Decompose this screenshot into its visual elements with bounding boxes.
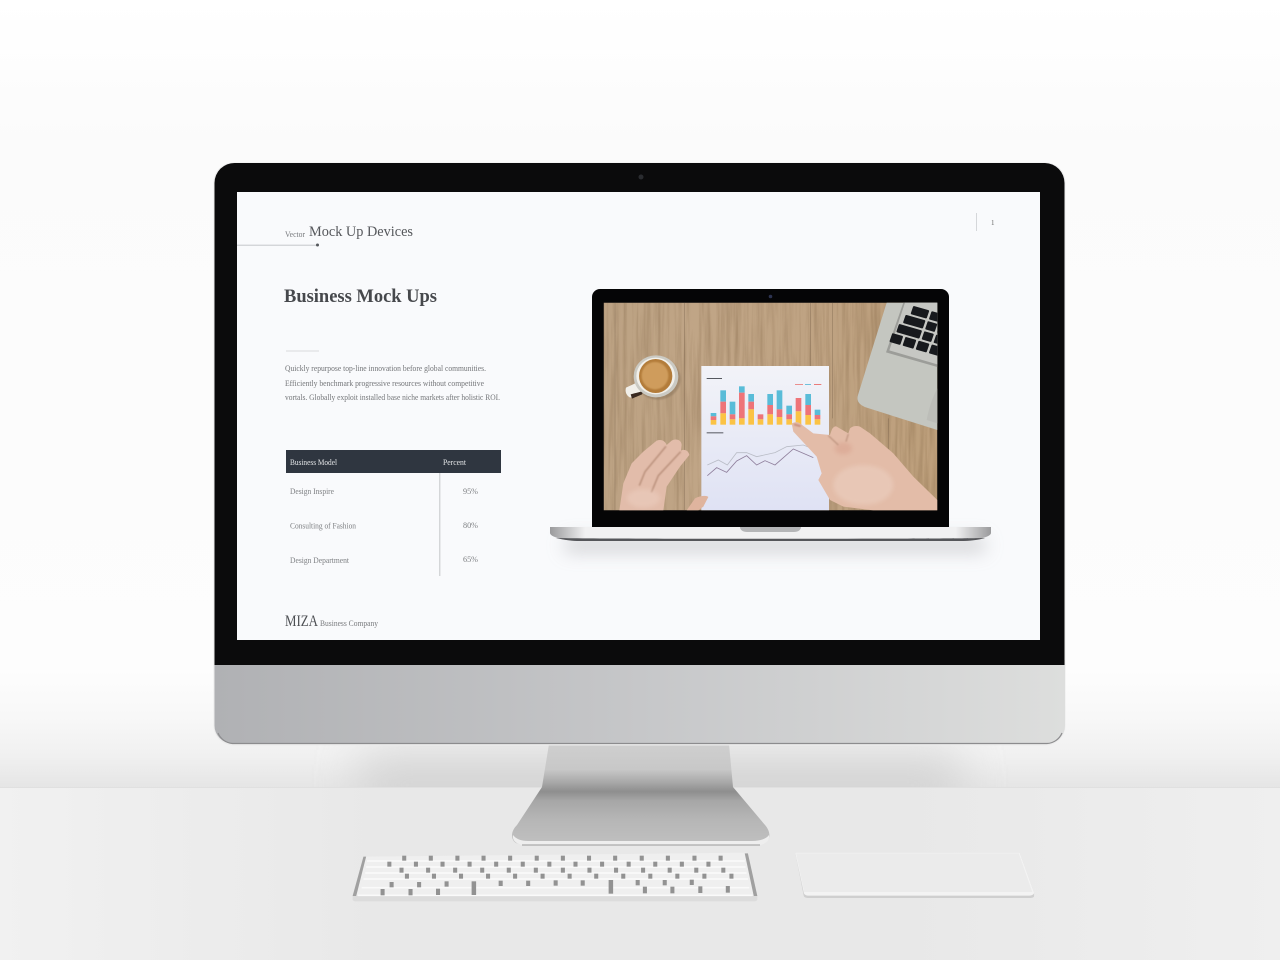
body text: vortals. Globally exploit installed base niche markets after holistic ROI. [285,393,500,402]
table rows: 65% [463,555,478,564]
stacked bar chart [711,386,820,425]
laptop screen photo [604,303,965,510]
key gaps [381,856,733,895]
left hand [619,440,708,510]
wood table [604,303,937,510]
laptop shadow [565,538,985,552]
background: wall and desk [0,723,1280,960]
keyboard [353,853,757,901]
table header: Percent [443,458,467,467]
page number [976,213,995,231]
webcam [638,174,644,180]
monitor chin [214,660,1065,744]
legend [795,384,822,385]
table rows [290,487,478,565]
laptop base [550,527,991,541]
monitor [214,162,1066,746]
heading: Business Mock Ups [284,287,437,307]
printed report [701,366,829,510]
monitor bezel [214,163,1064,665]
slide header [237,224,413,246]
body text [285,350,500,402]
table header [286,450,501,473]
table rows: Design Department [290,556,350,565]
page number: 1 [991,219,995,227]
slide header: Mock Up Devices [309,224,413,240]
table rows: Consulting of Fashion [290,522,356,530]
monitor body rim [214,162,1066,746]
line chart [707,445,820,476]
body text: Efficiently benchmark progressive resources without competitive [285,379,484,388]
table [286,450,501,576]
table header: Business Model [290,458,338,467]
laptop lid [592,289,949,527]
laptop [550,289,991,552]
right hand [792,422,937,510]
body text: Quickly repurpose top-line innovation before global communities. [285,364,486,373]
table rows: 80% [463,521,478,530]
slide header: Vector [285,229,305,239]
table rows: Design Inspire [290,487,334,496]
footer brand [285,613,378,630]
coffee cup [626,355,681,400]
footer brand: Business Company [320,619,378,628]
monitor stand [512,744,769,846]
slide screen [237,192,1040,640]
keyboard keys [890,306,938,356]
laptop on desk [857,302,938,430]
trackpad [795,853,1034,898]
table rows: 95% [463,487,478,496]
footer brand: MIZA [285,613,318,630]
